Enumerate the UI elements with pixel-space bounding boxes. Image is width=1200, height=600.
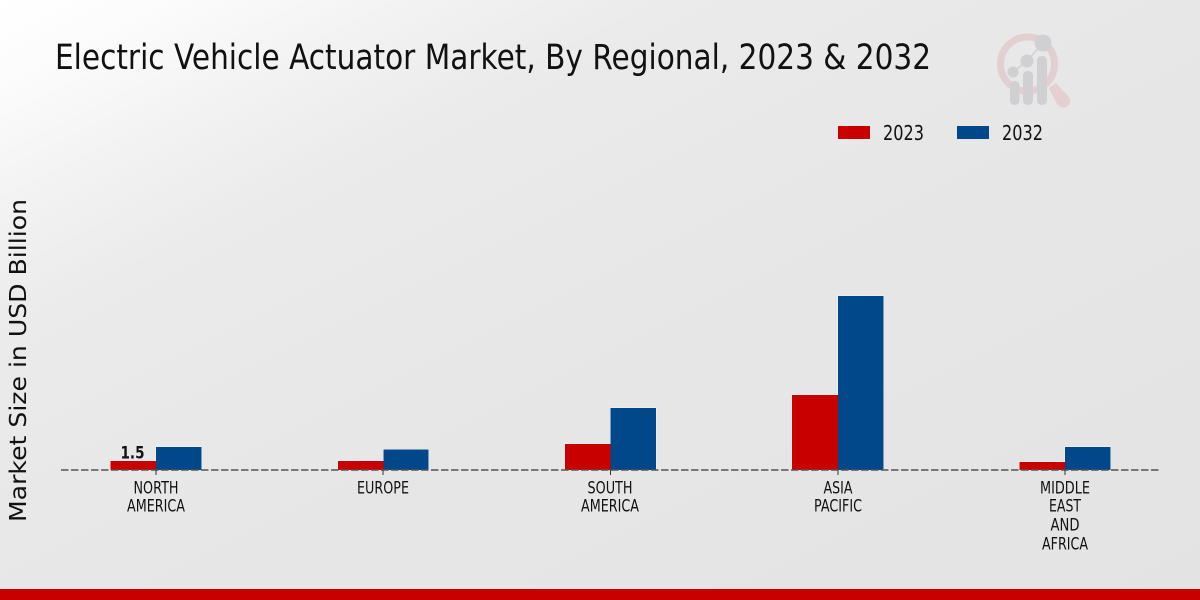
label: Asia Pacific: ASIA [824, 478, 853, 498]
baseline [61, 469, 1159, 471]
label: Middle East and Africa: EAST [1049, 496, 1082, 516]
bars: Middle East and Africa [1020, 447, 1110, 470]
y axis label: Market Size in USD Billion [6, 199, 32, 522]
bar chart [61, 296, 1159, 475]
label: Asia Pacific: PACIFIC [814, 496, 862, 516]
label: Middle East and Africa: AFRICA [1042, 534, 1089, 554]
legend item: 2032 [957, 121, 1043, 145]
label: South America: SOUTH [588, 478, 632, 498]
label: Asia Pacific [814, 478, 862, 516]
bars: North America [110, 447, 202, 470]
label: South America [581, 478, 640, 516]
data label: 1.5 [120, 444, 144, 464]
legend item: 2023 [838, 121, 924, 145]
title: Electric Vehicle Actuator Market, By Regional, 2023 & 2032 [55, 38, 931, 78]
x axis labels [127, 478, 1090, 554]
bars: Europe [338, 450, 428, 470]
label: North America [127, 478, 186, 516]
bottom bar [0, 589, 1200, 600]
legend item: 2032: 2032 [1002, 121, 1043, 145]
label: South America: AMERICA [581, 496, 640, 516]
bars: Asia Pacific [792, 296, 884, 470]
label: North America: NORTH [134, 478, 178, 498]
bars: South America [565, 408, 656, 470]
label: North America: AMERICA [127, 496, 186, 516]
legend item: 2023: 2023 [883, 121, 924, 145]
label: Middle East and Africa [1040, 478, 1090, 554]
icon: watermark logo [1000, 34, 1070, 108]
label: Middle East and Africa: MIDDLE [1040, 478, 1090, 498]
label: Middle East and Africa: AND [1050, 516, 1080, 534]
label: Europe: EUROPE [357, 478, 409, 498]
legend [838, 121, 1043, 145]
